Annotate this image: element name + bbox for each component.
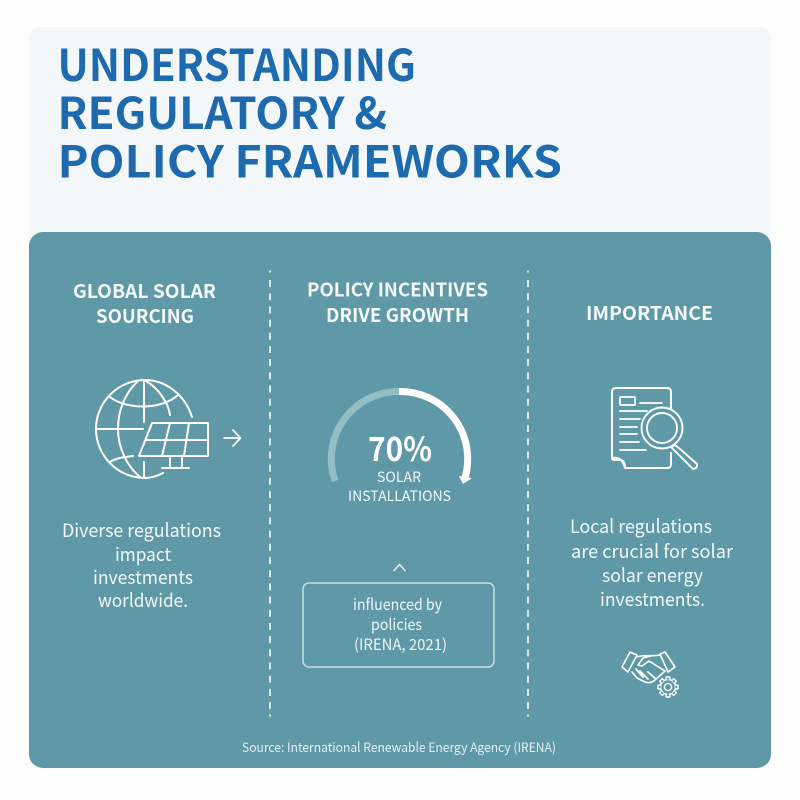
- text: diverse regulations: Diverse regulations: [62, 517, 221, 543]
- title: POLICY FRAMEWORKS: [58, 126, 562, 190]
- heading: importance: IMPORTANCE: [586, 299, 713, 326]
- text: local regulations: Local regulations: [570, 513, 712, 539]
- icon: chevron up: [394, 564, 406, 571]
- heading: policy incentives: POLICY INCENTIVES: [307, 276, 488, 302]
- callout: influenced by policies: (IRENA, 2021): [354, 633, 447, 655]
- text: diverse regulations: investments: [93, 564, 193, 590]
- callout: influenced by policies: influenced by: [353, 593, 442, 615]
- heading: policy incentives: [307, 276, 488, 328]
- text: diverse regulations: [62, 517, 221, 613]
- text: local regulations: [570, 513, 734, 612]
- text: local regulations: investments.: [600, 586, 705, 612]
- title: [58, 30, 562, 190]
- heading: global solar sourcing: GLOBAL SOLAR: [73, 277, 216, 304]
- icon: globe with solar panel: [96, 380, 240, 478]
- callout: influenced by policies: policies: [371, 613, 422, 635]
- chart: 70% gauge: [331, 391, 472, 506]
- icon: handshake with gear: [622, 652, 678, 697]
- main teal panel: [29, 232, 771, 768]
- gauge label: SOLAR: [377, 466, 421, 487]
- text: local regulations: are crucial for solar: [571, 538, 734, 564]
- text: diverse regulations: worldwide.: [98, 587, 188, 613]
- heading: policy incentives: DRIVE GROWTH: [326, 301, 469, 328]
- heading: global solar sourcing: [73, 277, 216, 329]
- text: diverse regulations: impact: [115, 541, 171, 567]
- callout: influenced by policies: [303, 583, 494, 667]
- title: UNDERSTANDING: [58, 30, 416, 94]
- icon: arrow right: [224, 430, 240, 446]
- title: REGULATORY &: [58, 78, 387, 142]
- gauge label: [348, 466, 451, 506]
- gauge label: INSTALLATIONS: [348, 485, 451, 506]
- icon: document with magnifier: [612, 388, 697, 469]
- text: local regulations: solar energy: [602, 562, 703, 588]
- heading: global solar sourcing: SOURCING: [96, 302, 194, 329]
- header panel: [29, 27, 771, 250]
- source note: Source: International Renewable Energy Agency (IRENA): [242, 737, 556, 756]
- gauge value: 70%: [368, 423, 432, 471]
